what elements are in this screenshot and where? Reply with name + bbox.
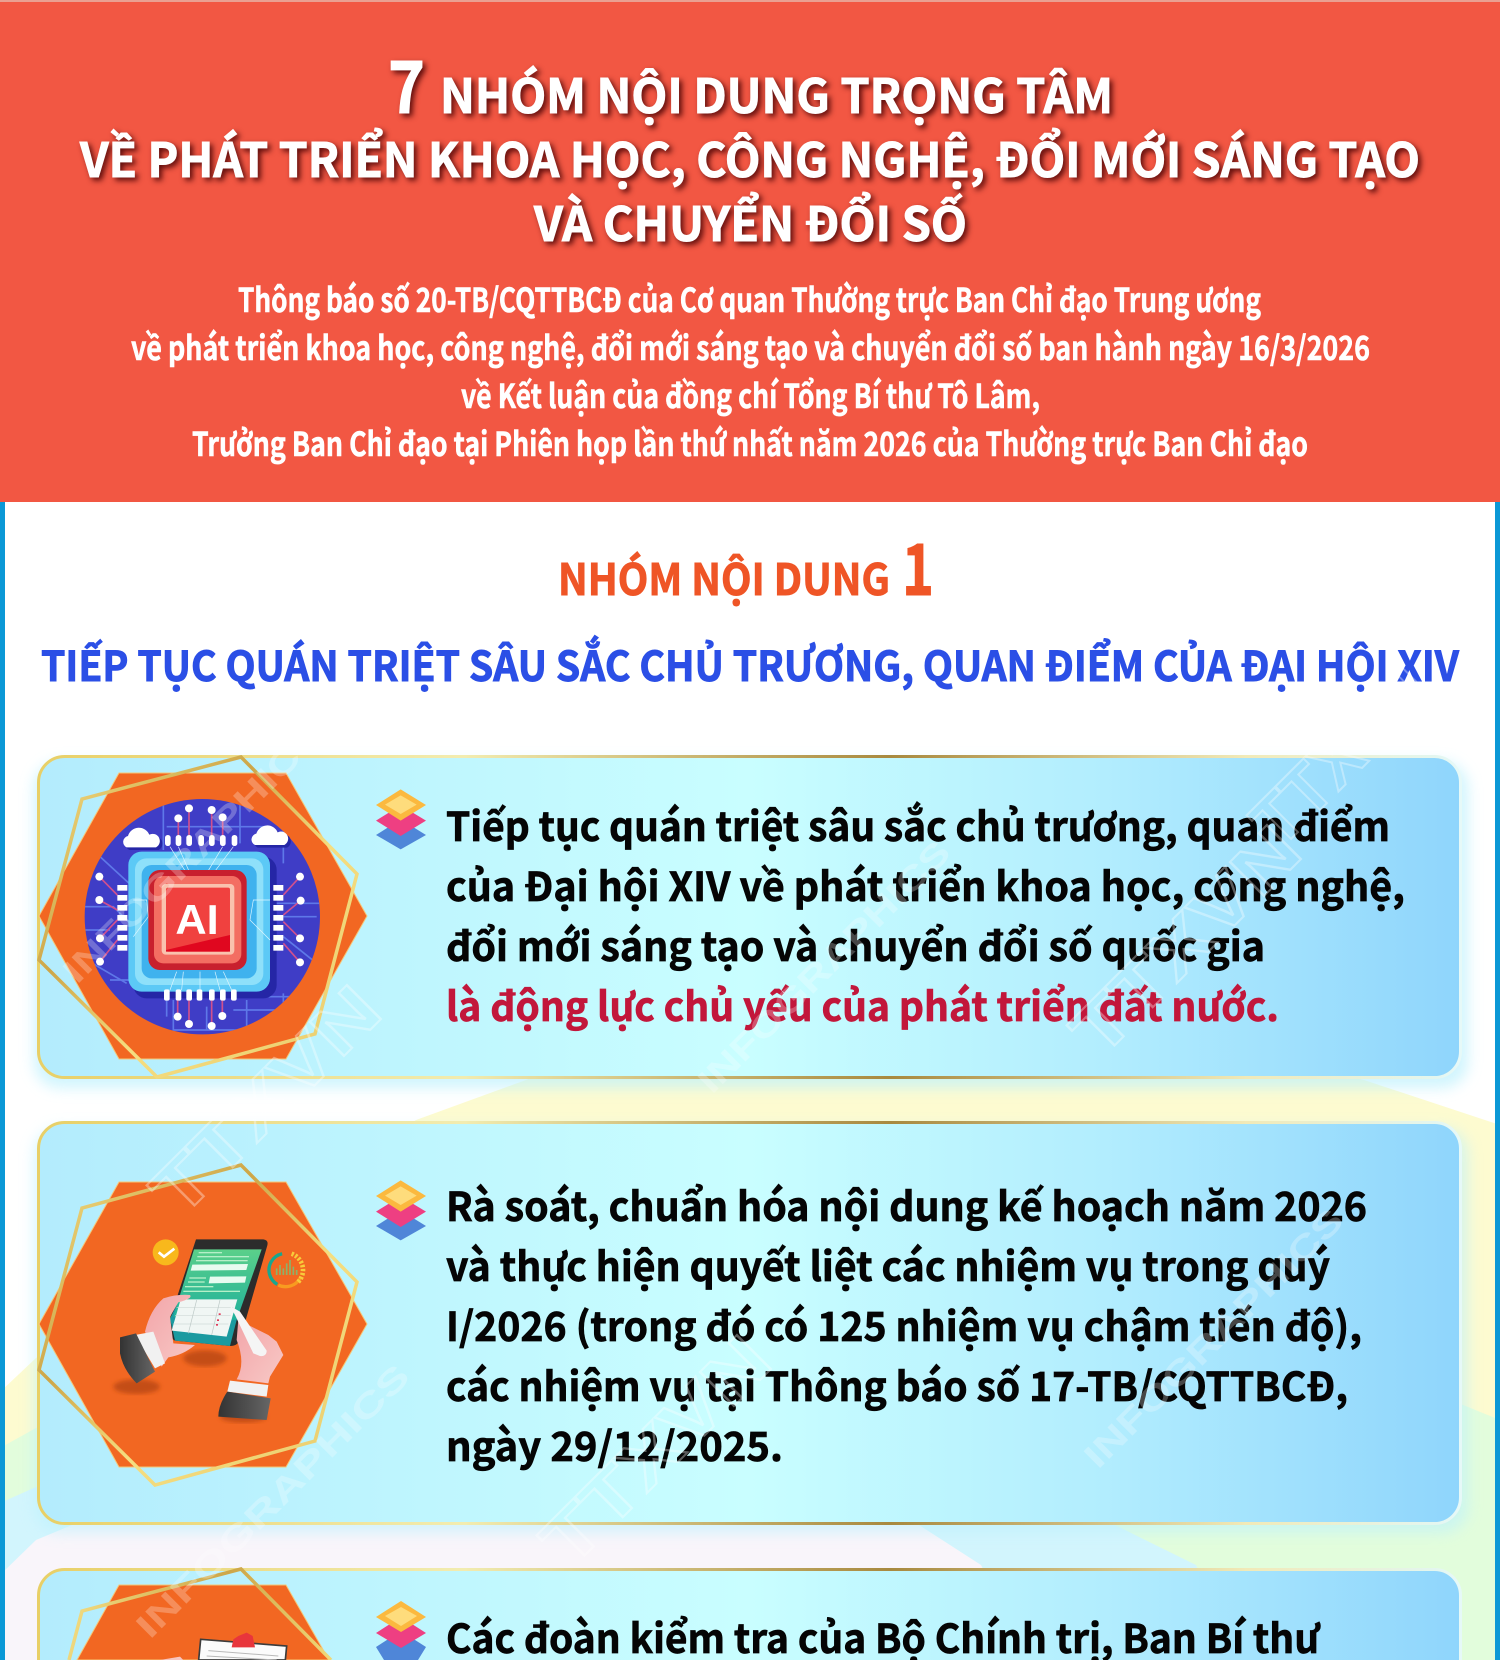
title [79,29,1420,255]
subtitle: Thông báo số 20-TB/CQTTBCĐ của Cơ quan Thường trực Ban Chỉ đạo Trung ương [238,274,1261,322]
watermarks: INFOGRAPHICS [56,716,330,991]
text block: card 1: đổi mới sáng tạo và chuyển đổi số quốc gia [446,915,1265,973]
panel: card 3 [38,1569,1460,1660]
watermarks: INFOGRAPHICS [1077,1201,1351,1476]
text block: card 1: của Đại hội XIV về phát triển khoa học, công nghệ, [446,855,1405,913]
icon: orange hexagon with tablet and hands [39,1165,367,1485]
title: VÀ CHUYỂN ĐỔI SỐ [533,186,967,255]
gauge [263,1247,308,1293]
section heading: TIẾP TỤC QUÁN TRIỆT SÂU SẮC CHỦ TRƯƠNG, QUAN ĐIỂM CỦA ĐẠI HỘI XIV [41,633,1460,693]
chip body [133,857,277,998]
icon: orange hexagon with clipboard [69,1569,331,1660]
header banner [0,0,1500,502]
tablet [170,1239,268,1346]
watermarks: TTXVN [1055,810,1316,1071]
watermarks: TTXVN [525,1320,786,1581]
title: 7 [388,29,425,134]
section label: nhóm nội dung 1: NHÓM NỘI DUNG [558,546,890,608]
watermarks [56,650,1446,1646]
text block: card 1: Tiếp tục quán triệt sâu sắc chủ trương, quan điểm [446,795,1390,853]
right hand and sleeve [237,1319,283,1383]
section label: nhóm nội dung 1: 1 [902,514,934,616]
text block: card 1 [446,795,1405,1033]
icon: orange hexagon with AI chip [39,757,367,1077]
text block: card 2: ngày 29/12/2025. [446,1415,783,1473]
icon: layered stack [376,1601,426,1660]
text block: card 1: là động lực chủ yếu của phát triển đất nước. [446,975,1279,1033]
icon: layered stack [376,789,426,849]
watermarks: INFOGRAPHICS [129,1357,417,1646]
chip pins [117,835,283,1001]
text block: card 2: và thực hiện quyết liệt các nhiệm vụ trong quý [446,1235,1330,1293]
right border bar [1495,502,1500,1660]
subtitle: về Kết luận của đồng chí Tổng Bí thư Tô Lâm, [461,370,1040,418]
icon: layered stack [376,1180,426,1240]
left border bar [0,502,5,1660]
icon: orange hexagon with AI chip: AI [175,896,219,943]
panel: card 1 [34,756,1468,1088]
clouds [126,828,291,850]
circuit nodes [99,808,301,1026]
title: NHÓM NỘI DUNG TRỌNG TÂM [440,58,1113,127]
text block: card 2: các nhiệm vụ tại Thông báo số 17-TB/CQTTBCĐ, [446,1355,1348,1413]
section label: nhóm nội dung 1 [558,514,934,616]
watermarks: TTXVN [1235,650,1446,861]
check badge [153,1239,179,1265]
title: VỀ PHÁT TRIỂN KHOA HỌC, CÔNG NGHỆ, ĐỔI MỚI SÁNG TẠO [79,122,1420,191]
panel: card 2 [34,1122,1468,1533]
text block: card 2 [446,1175,1367,1473]
watermarks: INFOGRAPHICS [691,833,958,1101]
text block: card 2: Rà soát, chuẩn hóa nội dung kế hoạch năm 2026 [446,1175,1367,1233]
text block: card 2: I/2026 (trong đó có 125 nhiệm vụ chậm tiến độ), [446,1295,1362,1353]
watermarks: TTXVN [135,970,396,1231]
left hand and sleeve [145,1295,195,1367]
subtitle [131,274,1370,466]
